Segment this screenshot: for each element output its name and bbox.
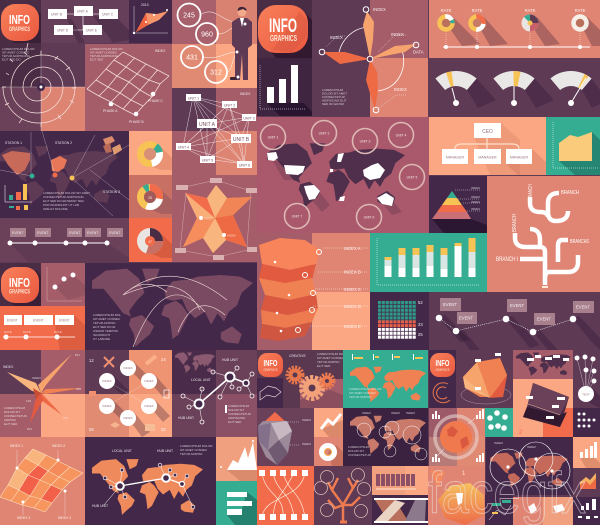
panel: bar chart dark bbox=[257, 58, 312, 116]
lorem text block bbox=[322, 88, 347, 106]
badge: small INFO: INFO bbox=[264, 358, 278, 368]
lorem text block: ADIPISC bbox=[4, 418, 17, 422]
panel: compass star: 288 bbox=[76, 387, 81, 391]
panel: CEO org chart: MANAGER bbox=[478, 156, 497, 160]
ring unit 6: UNIT 6 bbox=[364, 216, 374, 220]
panel: dark map with dotted rings: INDEX bbox=[391, 411, 400, 415]
panel: compass star: 821 bbox=[75, 353, 80, 357]
badge: INFO GRAPHICS top left: INFO bbox=[9, 12, 30, 27]
badge: small INFO with arcs: INFO bbox=[436, 358, 450, 368]
ring unit 4: UNIT 4 bbox=[396, 134, 406, 138]
panel: radial index blades: INDEX bbox=[394, 87, 407, 92]
badge: small INFO: GRAPHICS bbox=[264, 368, 278, 372]
badge: INFO GRAPHICS left: INFO bbox=[9, 275, 30, 290]
panel: network of units: UNIT 2 bbox=[224, 103, 235, 107]
lorem text block: SIT AMET CONSEC bbox=[93, 317, 121, 321]
panel: event dots line: EVENT bbox=[459, 316, 473, 320]
panel: creative gears with badge bbox=[257, 350, 350, 408]
panel: gauges bbox=[429, 59, 600, 117]
panel: rate donuts timeline: RATE bbox=[525, 8, 536, 13]
panel: map with tags and folded book bbox=[513, 350, 573, 437]
panel: radial index blades: INDEX bbox=[330, 35, 343, 40]
data circle 960: 960 bbox=[201, 32, 213, 38]
panel: six white circles: INDEX bbox=[102, 404, 112, 408]
panel: donut tiles bbox=[129, 131, 172, 262]
lorem text block: DOLOR SIT bbox=[348, 449, 364, 453]
ring unit 3: UNIT 3 bbox=[360, 140, 370, 144]
lorem text block: CONSECTETUR bbox=[4, 414, 28, 418]
panel: phase grid: PHASE B bbox=[129, 120, 144, 124]
panel: pyramid: INDEX bbox=[471, 195, 480, 199]
panel: radial index blades: DATA bbox=[413, 50, 424, 54]
badge: large INFO GRAPHICS bbox=[257, 0, 312, 58]
panel: compass star bbox=[0, 350, 85, 437]
lorem text block: SIT AMET CONSEC bbox=[349, 391, 377, 395]
panel: hub network: HUB UNIT bbox=[178, 416, 194, 420]
panel: pyramid bbox=[429, 176, 487, 233]
lorem text block: SIT AMET CONSEC bbox=[317, 356, 345, 360]
panel: orange sankey lines bbox=[257, 466, 314, 525]
ring unit 6 bbox=[356, 204, 382, 230]
panel: white dot cluster: TEXT bbox=[582, 392, 590, 396]
panel: teal list bars bbox=[216, 481, 257, 525]
panel: compass star: 921 bbox=[27, 427, 32, 431]
lorem text block: LOREM IPSUM DOLOR SIT AMET bbox=[43, 191, 90, 195]
icon: gear medium bbox=[320, 374, 334, 388]
panel: waffle chart: 52 bbox=[418, 300, 423, 305]
panel: event timeline bbox=[0, 218, 129, 262]
blade left bbox=[323, 52, 370, 64]
lorem text block bbox=[228, 404, 252, 424]
ring unit 1: UNIT 1 bbox=[268, 136, 278, 140]
panel: salmon polygon with paper plane bbox=[428, 466, 485, 525]
panel: event timeline: EVENT bbox=[87, 231, 98, 235]
panel: phase grid: PHASE A bbox=[103, 109, 118, 113]
icon: graduation cap bbox=[110, 422, 120, 428]
panel: orange event boxes: EVENT bbox=[7, 318, 18, 322]
panel: orange surface: INDEX 3 bbox=[17, 516, 30, 520]
icon: pencil bbox=[146, 356, 156, 364]
badge: INFO GRAPHICS top left: GRAPHICS bbox=[9, 27, 30, 33]
panel: creative gears with badge: CREATIVE bbox=[289, 354, 306, 358]
panel: donut tiles: 47 bbox=[148, 240, 152, 244]
panel: six white circles: INDEX bbox=[123, 416, 133, 420]
panel: network of units: UNIT 6 bbox=[239, 163, 250, 167]
panel: station map: STATION 2 bbox=[55, 141, 72, 145]
panel: phase grid: INDEX bbox=[155, 49, 166, 53]
lorem text block: UT LABORE bbox=[93, 337, 110, 341]
panel: event dots line: EVENT bbox=[537, 316, 551, 322]
data circle 312: 312 bbox=[210, 70, 222, 76]
lorem text block: ADIPISCING ELIT bbox=[322, 98, 347, 102]
panel: star polygon: INDEX bbox=[227, 234, 236, 238]
badge: small INFO with arcs: GRAPHICS bbox=[436, 368, 450, 372]
panel: world map with unit rings bbox=[257, 117, 429, 233]
panel: network of units: UNIT A bbox=[199, 122, 216, 128]
lorem text block bbox=[93, 313, 121, 341]
lorem text block: LOREM IPSUM bbox=[228, 404, 250, 408]
panel: pyramid: INDEX bbox=[471, 200, 480, 204]
panel: iceberg rock: INDEX bbox=[302, 442, 311, 446]
lorem text block: DOLOR SIT bbox=[4, 410, 20, 414]
gauge 2 bbox=[493, 71, 535, 106]
badge: INFO GRAPHICS left bbox=[0, 263, 41, 306]
panel: area chart dark bbox=[129, 0, 172, 43]
panel: six white circles: 08 bbox=[89, 427, 94, 432]
panel: orange surface: INDEX 1 bbox=[10, 444, 23, 448]
panel: iceberg rock: INDEX bbox=[302, 418, 311, 422]
panel: teal dots tile bbox=[485, 408, 513, 437]
panel: CEO org chart: MANAGER bbox=[510, 156, 528, 160]
panel: salmon white shapes tile bbox=[513, 497, 573, 525]
panel: branch tree: BRANCH bbox=[528, 184, 534, 200]
lorem text block bbox=[2, 47, 35, 62]
icon: speech bubble bbox=[89, 391, 96, 398]
panel: spiky area chart bbox=[216, 437, 257, 481]
panel: station map: STATION 3 bbox=[103, 190, 120, 194]
lorem text block: ELIT SED bbox=[228, 420, 242, 424]
panel: branch tree: BRANCH bbox=[512, 214, 518, 232]
mini bar chart bbox=[5, 184, 32, 210]
icon: wrench and tools bbox=[104, 357, 114, 367]
lorem text block: INCIDIDUNT bbox=[93, 333, 110, 337]
panel: network of units bbox=[172, 88, 257, 175]
panel: dark map with dotted rings bbox=[343, 408, 428, 466]
panel: dark sankey bars bbox=[372, 495, 428, 525]
panel: rate donuts timeline: RATE bbox=[441, 8, 452, 13]
panel: teal area chart bbox=[546, 117, 600, 175]
lorem text block: LOREM IPSUM DOLOR bbox=[2, 47, 35, 51]
lorem text block: ELIT SED bbox=[317, 364, 331, 368]
panel: CEO org chart bbox=[429, 117, 546, 175]
panel: globe with bars bbox=[429, 408, 485, 466]
lorem text block: DOLOR SIT AMET bbox=[322, 92, 347, 96]
panel: event timeline: EVENT bbox=[37, 231, 48, 235]
icon: gear small bbox=[288, 368, 302, 382]
panel: spiral radar bbox=[0, 43, 85, 131]
panel: phase grid: PHASE C bbox=[148, 99, 163, 103]
donut rate 3 bbox=[522, 14, 538, 32]
panel: dot matrix tile bbox=[573, 408, 600, 437]
lorem text block: DOLOR SIT bbox=[228, 408, 244, 412]
icon: film strip bbox=[145, 424, 155, 431]
panel: dark map with dotted rings: INDEX bbox=[362, 411, 371, 415]
lorem text block: ELIT SED DO EIUSMOD TEM bbox=[43, 199, 84, 203]
lorem text block: LOREM IPSUM DOLOR bbox=[180, 444, 213, 448]
lorem text block: TETUR ADIPISCING bbox=[90, 54, 119, 58]
donut rate 1 bbox=[440, 16, 452, 30]
blade down bbox=[366, 59, 378, 110]
ring unit 3 bbox=[352, 128, 378, 154]
panel: bottom hub world map: HUB UNIT bbox=[92, 504, 108, 508]
panel: teal orange world map bbox=[343, 350, 428, 408]
lorem text block: ELIT SED DO bbox=[2, 58, 21, 62]
panel: event dots line: EVENT bbox=[443, 302, 457, 307]
panel: layered rock index: INDEX A bbox=[344, 246, 361, 251]
panel: dot trend bbox=[41, 263, 85, 306]
panel: unit flow chart: UNIT C bbox=[102, 12, 114, 16]
data circle 245: 245 bbox=[183, 12, 195, 20]
panel: stacked bars tile bbox=[573, 437, 600, 468]
lorem text block: CONSECTETUR bbox=[348, 453, 372, 457]
lorem text block bbox=[349, 387, 382, 399]
lorem text block: SIT AMET CONSEC bbox=[90, 50, 118, 54]
lorem text block: LOREM IPSUM bbox=[322, 88, 344, 92]
panel: salmon polygon with paper plane: 1 bbox=[462, 471, 466, 477]
badge: INFO GRAPHICS top left bbox=[0, 0, 41, 43]
panel: six white circles: INDEX bbox=[102, 379, 112, 383]
panel: three ring world map bbox=[486, 437, 573, 495]
ring unit 2: UNIT 2 bbox=[319, 132, 329, 136]
panel: dark small chart tile bbox=[573, 497, 600, 525]
panel: orange event boxes: DATE bbox=[4, 330, 12, 334]
badge: large INFO GRAPHICS: INFO bbox=[269, 16, 297, 37]
lorem text block: CONSECTETUR ADIPISCING bbox=[43, 195, 85, 199]
panel: compass star: INDEX bbox=[3, 365, 14, 369]
badge: small INFO bbox=[258, 353, 283, 377]
panel: orange event boxes: EVENT bbox=[59, 318, 70, 322]
donut 1 bbox=[140, 144, 160, 164]
donut 3 bbox=[137, 228, 163, 254]
panel: waffle chart: 25 bbox=[418, 332, 423, 337]
panel: three ring world map: INDEX bbox=[494, 441, 503, 445]
panel: six white circles: 24 bbox=[161, 357, 166, 362]
badge: INFO GRAPHICS left: GRAPHICS bbox=[9, 290, 30, 296]
panel: donut tiles: 28 bbox=[148, 196, 152, 200]
panel: dark teal flow tile bbox=[485, 495, 513, 525]
lorem text block: LOREM IPSUM bbox=[348, 445, 370, 449]
lorem text block bbox=[348, 445, 372, 457]
lorem text block: ELIT SED bbox=[4, 422, 18, 426]
panel: branch tree bbox=[487, 176, 600, 292]
lorem text block bbox=[317, 352, 350, 368]
panel: three ring world map: INDEX bbox=[527, 445, 536, 449]
panel: white dot cluster bbox=[573, 350, 600, 408]
panel: CEO org chart: CEO bbox=[482, 129, 493, 135]
lorem text block: POR INCIDIDUNT UT LAB bbox=[43, 203, 79, 207]
ring unit 2 bbox=[312, 120, 336, 146]
panel: network of units: UNIT 5 bbox=[202, 158, 213, 162]
panel: orange surface: INDEX 2 bbox=[52, 444, 65, 448]
panel: event dots line bbox=[429, 292, 600, 350]
blade up bbox=[363, 11, 374, 59]
lorem text block: LOREM IPSUM DOL bbox=[93, 313, 121, 317]
panel: layered rock index: INDEX D bbox=[344, 304, 361, 309]
lorem text block: LOREM IPSUM bbox=[4, 406, 26, 410]
gauge 3 bbox=[550, 71, 592, 106]
panel: orange event boxes: EVENT bbox=[33, 318, 44, 322]
lorem text block: SED DO EIUSM bbox=[322, 102, 344, 106]
donut rate 4 bbox=[574, 16, 586, 30]
panel: layered rock index: INDEX B bbox=[344, 270, 361, 274]
panel: teal bar chart bbox=[370, 233, 487, 292]
panel: orange surface bbox=[0, 437, 85, 525]
panel: white ring tile bbox=[314, 437, 343, 466]
panel: six white circles: INDEX bbox=[123, 366, 133, 370]
lorem text block: SIT AMET CONSEC bbox=[180, 448, 208, 452]
panel: unit flow chart: UNIT B bbox=[51, 12, 63, 16]
panel: network of units: UNIT 1 bbox=[188, 96, 199, 100]
panel: unit flow chart: UNIT E bbox=[86, 28, 98, 32]
lorem text block: USMOD TEMPOR bbox=[93, 329, 119, 333]
panel: six white circles: INDEX bbox=[144, 404, 154, 408]
panel: station map: STATION 1 bbox=[5, 141, 22, 145]
panel: area chart dark: 2013 bbox=[141, 3, 149, 7]
panel: rate donuts timeline: RATE bbox=[472, 8, 483, 13]
ring unit 7: UNIT 7 bbox=[292, 214, 302, 218]
lorem text block: ELIT SED DO EI bbox=[93, 325, 115, 329]
panel: branch tree: BRANCHS bbox=[570, 239, 589, 245]
panel: layered rock index bbox=[257, 233, 370, 350]
panel: bottom hub world map: LOCAL UNIT bbox=[112, 449, 132, 453]
panel: network of units: UNIT 4 bbox=[178, 145, 189, 149]
lorem text block: LOREM IPSUM DOLOR bbox=[317, 352, 350, 356]
panel: people bars tile bbox=[372, 466, 428, 495]
lorem text block: LOREM IPSUM DOLOR bbox=[349, 387, 382, 391]
figure: man in suit bbox=[230, 7, 252, 80]
panel: event dots line: EVENT bbox=[576, 304, 590, 310]
panel: network of units: INDEX bbox=[240, 92, 251, 96]
panel: six white circles bbox=[85, 350, 172, 437]
lorem text block bbox=[4, 406, 28, 426]
panel: layered rock index: INDEX E bbox=[344, 324, 361, 329]
ring unit 7 bbox=[284, 204, 310, 228]
icon: line sketch bbox=[260, 386, 281, 400]
panel: orange event boxes: DATE bbox=[54, 330, 62, 334]
lorem text block: TETUR ADIPISC bbox=[93, 321, 117, 325]
panel: branch tree: BRANCH I bbox=[496, 257, 518, 263]
panel: pyramid: INDEX bbox=[471, 186, 480, 190]
lorem text block: SIT AMET CONSEC bbox=[2, 50, 30, 54]
panel: network of units: UNIT B bbox=[233, 137, 250, 143]
panel: waffle chart: 23 bbox=[418, 322, 423, 327]
panel: three ring world map: INDEX bbox=[555, 483, 564, 487]
panel: six white circles: 12 bbox=[89, 358, 94, 363]
panel: star polygon bbox=[172, 175, 257, 262]
ring unit 5 bbox=[400, 164, 424, 190]
lorem text block: ORE ET DOLORE bbox=[43, 207, 68, 211]
panel: compass star: 138 bbox=[26, 399, 31, 403]
panel: event dots line: EVENT bbox=[510, 303, 524, 308]
panel: radial index blades: INDEX bbox=[391, 32, 404, 37]
lorem text block: ADIPISCING bbox=[228, 416, 246, 420]
panel: branch tree: BRANCH bbox=[561, 190, 579, 196]
panel: dark map with dotted rings: INDEX bbox=[406, 411, 415, 415]
panel: map with tags and folded book: 2 bbox=[519, 430, 523, 436]
panel: event timeline: EVENT bbox=[12, 231, 23, 235]
panel: unit flow chart: UNIT D bbox=[57, 28, 69, 32]
panel: radial index blades bbox=[312, 0, 428, 117]
lorem text block bbox=[90, 47, 123, 62]
panel: event timeline: EVENT bbox=[109, 231, 120, 235]
gauge 1 bbox=[435, 71, 477, 106]
panel: compass star: 741 bbox=[63, 416, 68, 420]
lorem text block: TETUR ADIPISC bbox=[180, 452, 204, 456]
panel: star polygon: INDEX bbox=[204, 216, 213, 220]
lorem text block: TETUR ADIPISCING bbox=[2, 54, 31, 58]
panel: hub network: LOCAL UNIT bbox=[191, 378, 211, 382]
panel: pyramid: INDEX bbox=[471, 207, 480, 211]
panel: world map with arcs bbox=[85, 263, 257, 350]
panel: rate donuts timeline bbox=[429, 0, 600, 58]
panel: phase grid bbox=[85, 44, 172, 131]
panel: six white circles: 32 bbox=[161, 427, 166, 432]
lorem text block: CONSECTETUR bbox=[322, 95, 346, 99]
panel: orange event boxes: DATE bbox=[23, 330, 31, 334]
donut rate 2 bbox=[470, 16, 484, 30]
ring unit 1 bbox=[260, 124, 286, 150]
icon: gear large bbox=[302, 378, 322, 398]
blade right bbox=[370, 44, 416, 59]
lorem text block: ELIT SED bbox=[90, 58, 104, 62]
panel: event timeline: EVENT bbox=[69, 231, 80, 235]
panel: rate donuts timeline: RATE bbox=[575, 8, 586, 13]
panel: orange surface: INDEX 4 bbox=[58, 516, 71, 520]
lorem text block: TETUR ADIPISC bbox=[349, 395, 373, 399]
panel: compass star: INDEX bbox=[32, 376, 41, 380]
panel: hub network bbox=[172, 350, 257, 437]
panel: businessman with data circles bbox=[172, 0, 257, 88]
ring unit 4 bbox=[388, 122, 414, 148]
panel: unit flow chart: UNIT A bbox=[77, 10, 89, 14]
badge: small INFO with arcs bbox=[429, 350, 456, 408]
data circle 431: 431 bbox=[186, 54, 198, 62]
panel: radial index blades: INDEX bbox=[373, 7, 386, 12]
panel: bottom hub world map bbox=[85, 437, 216, 525]
panel: tree with rings bbox=[314, 466, 372, 525]
panel: unit flow chart bbox=[41, 0, 129, 43]
panel: waffle chart bbox=[370, 292, 429, 350]
panel: hub network: HUB UNIT bbox=[222, 358, 238, 362]
panel: orange event boxes bbox=[0, 306, 85, 350]
panel: station map bbox=[0, 131, 129, 218]
donut 2 bbox=[140, 188, 160, 206]
icon: device bbox=[164, 390, 169, 398]
panel: zigzag arrow tile bbox=[314, 408, 343, 437]
panel: layered rock index: INDEX C bbox=[344, 287, 361, 292]
panel: area chart tile bbox=[573, 468, 600, 497]
panel: iceberg rock bbox=[257, 408, 314, 466]
icon: cubes bbox=[103, 136, 122, 155]
ring unit 5: UNIT 5 bbox=[407, 176, 417, 180]
panel: bottom hub world map: HUB UNIT bbox=[157, 449, 173, 453]
panel: network of units: UNIT 3 bbox=[243, 116, 255, 120]
panel: orange polygon radar bbox=[456, 350, 513, 408]
lorem text block: LOREM IPSUM DOLOR bbox=[90, 47, 123, 51]
lorem text block: CONSECTETUR bbox=[228, 412, 252, 416]
badge: large INFO GRAPHICS: GRAPHICS bbox=[270, 34, 297, 43]
panel: six white circles: INDEX bbox=[144, 379, 154, 383]
panel: CEO org chart: MANAGER bbox=[446, 156, 464, 160]
lorem text block bbox=[180, 444, 213, 456]
lorem text block: TETUR ADIPISC bbox=[317, 360, 341, 364]
lorem text block bbox=[43, 191, 90, 211]
